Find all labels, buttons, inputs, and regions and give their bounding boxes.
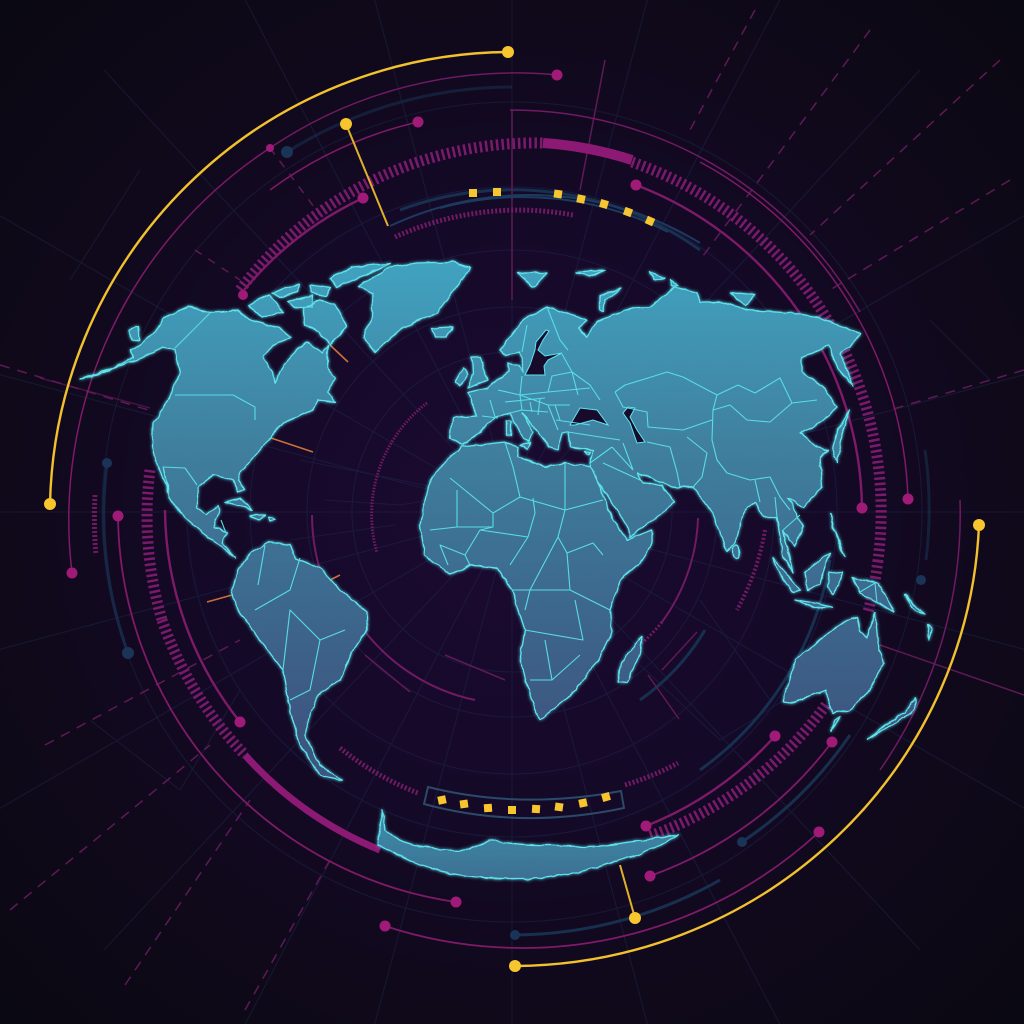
country borders [163, 307, 877, 700]
caribbean islands [225, 498, 275, 522]
new zealand [867, 697, 915, 740]
yellow squares bottom [437, 792, 611, 814]
madagascar [618, 637, 642, 683]
baltic sea [525, 330, 562, 375]
black sea [570, 408, 608, 425]
short orange accent lines [207, 345, 348, 602]
yellow squares top [469, 188, 655, 226]
magenta nodes [66, 70, 914, 932]
borneo [805, 553, 830, 590]
tick ring: outer segmented band [147, 143, 881, 836]
canadian arctic islands [248, 263, 390, 345]
top bracket frame [390, 195, 700, 243]
greenland [358, 262, 470, 352]
antarctica [378, 810, 678, 879]
north america [80, 307, 335, 558]
blue node dots [102, 146, 926, 940]
tasmania [830, 717, 840, 732]
caspian sea [623, 407, 645, 443]
australia [783, 613, 883, 713]
iceland [432, 327, 453, 337]
inland seas [525, 330, 645, 443]
bottom bracket frame [424, 787, 624, 818]
world map [80, 262, 932, 879]
thick magenta highlight arcs [245, 143, 632, 850]
africa [420, 442, 652, 720]
new guinea [853, 578, 895, 612]
uk and ireland [455, 357, 488, 388]
novaya zemlya [600, 288, 621, 312]
yellow connector top [346, 124, 388, 226]
sri lanka [733, 546, 739, 558]
svalbard and arctic isles [518, 270, 755, 305]
yellow connector bottom [620, 865, 635, 918]
yellow arc lower right [515, 525, 979, 966]
java [795, 600, 833, 608]
mediterranean islands [507, 421, 590, 455]
melanesia [905, 595, 932, 640]
japan [832, 410, 850, 463]
inner magenta arcs [94, 73, 960, 793]
magenta connector arcs with end nodes [69, 122, 908, 948]
yellow arc upper left [50, 52, 508, 504]
philippines [830, 513, 845, 557]
blue secondary arcs [104, 87, 929, 935]
eurasia [450, 287, 860, 573]
sumatra [773, 558, 800, 592]
south america [232, 542, 367, 780]
aleutian-adjacent island [128, 327, 139, 340]
sulawesi [827, 572, 843, 595]
